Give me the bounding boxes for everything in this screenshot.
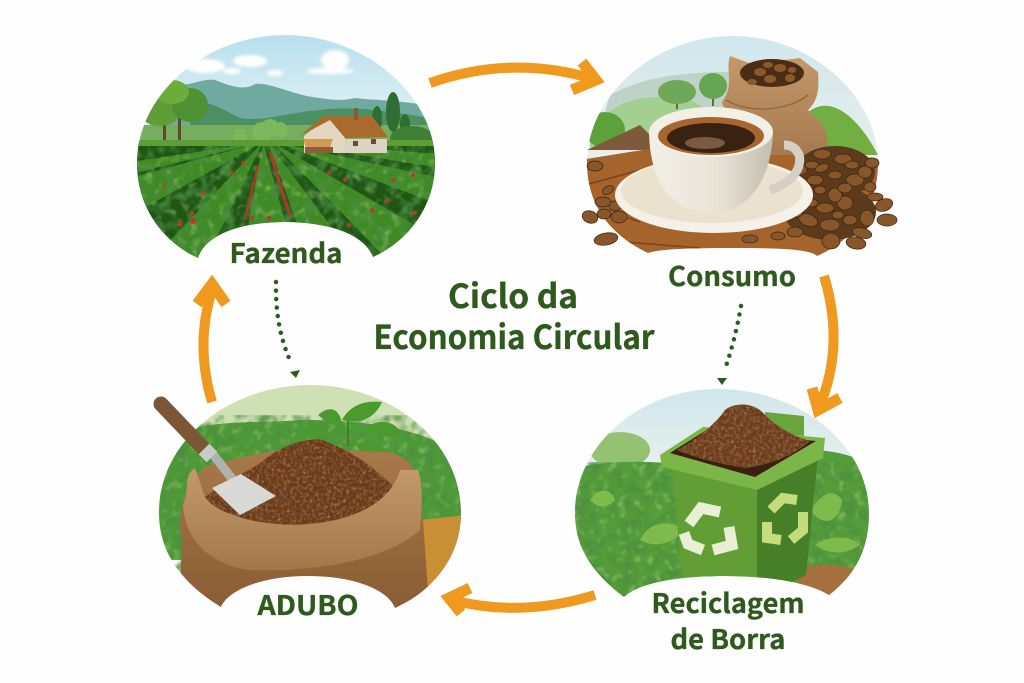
- infographic canvas: [137, 35, 898, 650]
- cypress trees: [372, 92, 433, 142]
- arrow: Reciclagem to Adubo: [449, 588, 595, 613]
- panel: Fazenda: [130, 30, 440, 271]
- panel: Consumo: [580, 30, 897, 294]
- recycling bin: [660, 412, 825, 600]
- panel: Reciclagem de Borra: [570, 385, 875, 657]
- recycling symbol left: [684, 508, 732, 550]
- arrow: Fazenda to Consumo: [430, 62, 596, 90]
- title: Ciclo da: [448, 270, 578, 318]
- saucer: [615, 157, 813, 233]
- arrow: Adubo to Fazenda: [197, 284, 226, 402]
- coffee beans: [580, 146, 897, 251]
- burlap sack: [180, 449, 428, 610]
- sack rim: [183, 468, 422, 570]
- label: Fazenda: Fazenda: [230, 232, 342, 271]
- title: [374, 270, 655, 359]
- compost pile: [205, 439, 393, 525]
- photo: plantation background: [570, 385, 875, 603]
- farmhouse: [300, 108, 388, 153]
- arrow: Consumo to Reciclagem: [812, 276, 840, 410]
- distant trees: [658, 73, 727, 109]
- label: Reciclagem de Borra: de Borra: [670, 618, 786, 657]
- photo: coffee farm: [130, 30, 440, 263]
- panel: Adubo: [150, 380, 470, 623]
- trees: [140, 80, 208, 141]
- dotted arrow: Consumo to Reciclagem: [717, 306, 741, 385]
- compost in bin: [677, 404, 810, 468]
- farm field: [130, 140, 440, 263]
- seedling: [293, 402, 403, 460]
- label: ADUBO: ADUBO: [256, 584, 358, 623]
- photo: background foliage: [150, 380, 470, 600]
- trowel: [161, 404, 276, 515]
- label: Reciclagem de Borra: [652, 582, 804, 657]
- wooden table: [580, 148, 885, 260]
- recycling symbol right: [767, 498, 803, 540]
- dotted arrow: Fazenda to Adubo: [276, 282, 300, 378]
- label: Consumo: Consumo: [668, 255, 796, 294]
- title: Economia Circular: [374, 311, 655, 359]
- label: Reciclagem de Borra: Reciclagem: [652, 582, 804, 621]
- coffee cup: [649, 107, 800, 213]
- photo: coffee cup background: [580, 30, 885, 260]
- coffee sack: [722, 56, 827, 155]
